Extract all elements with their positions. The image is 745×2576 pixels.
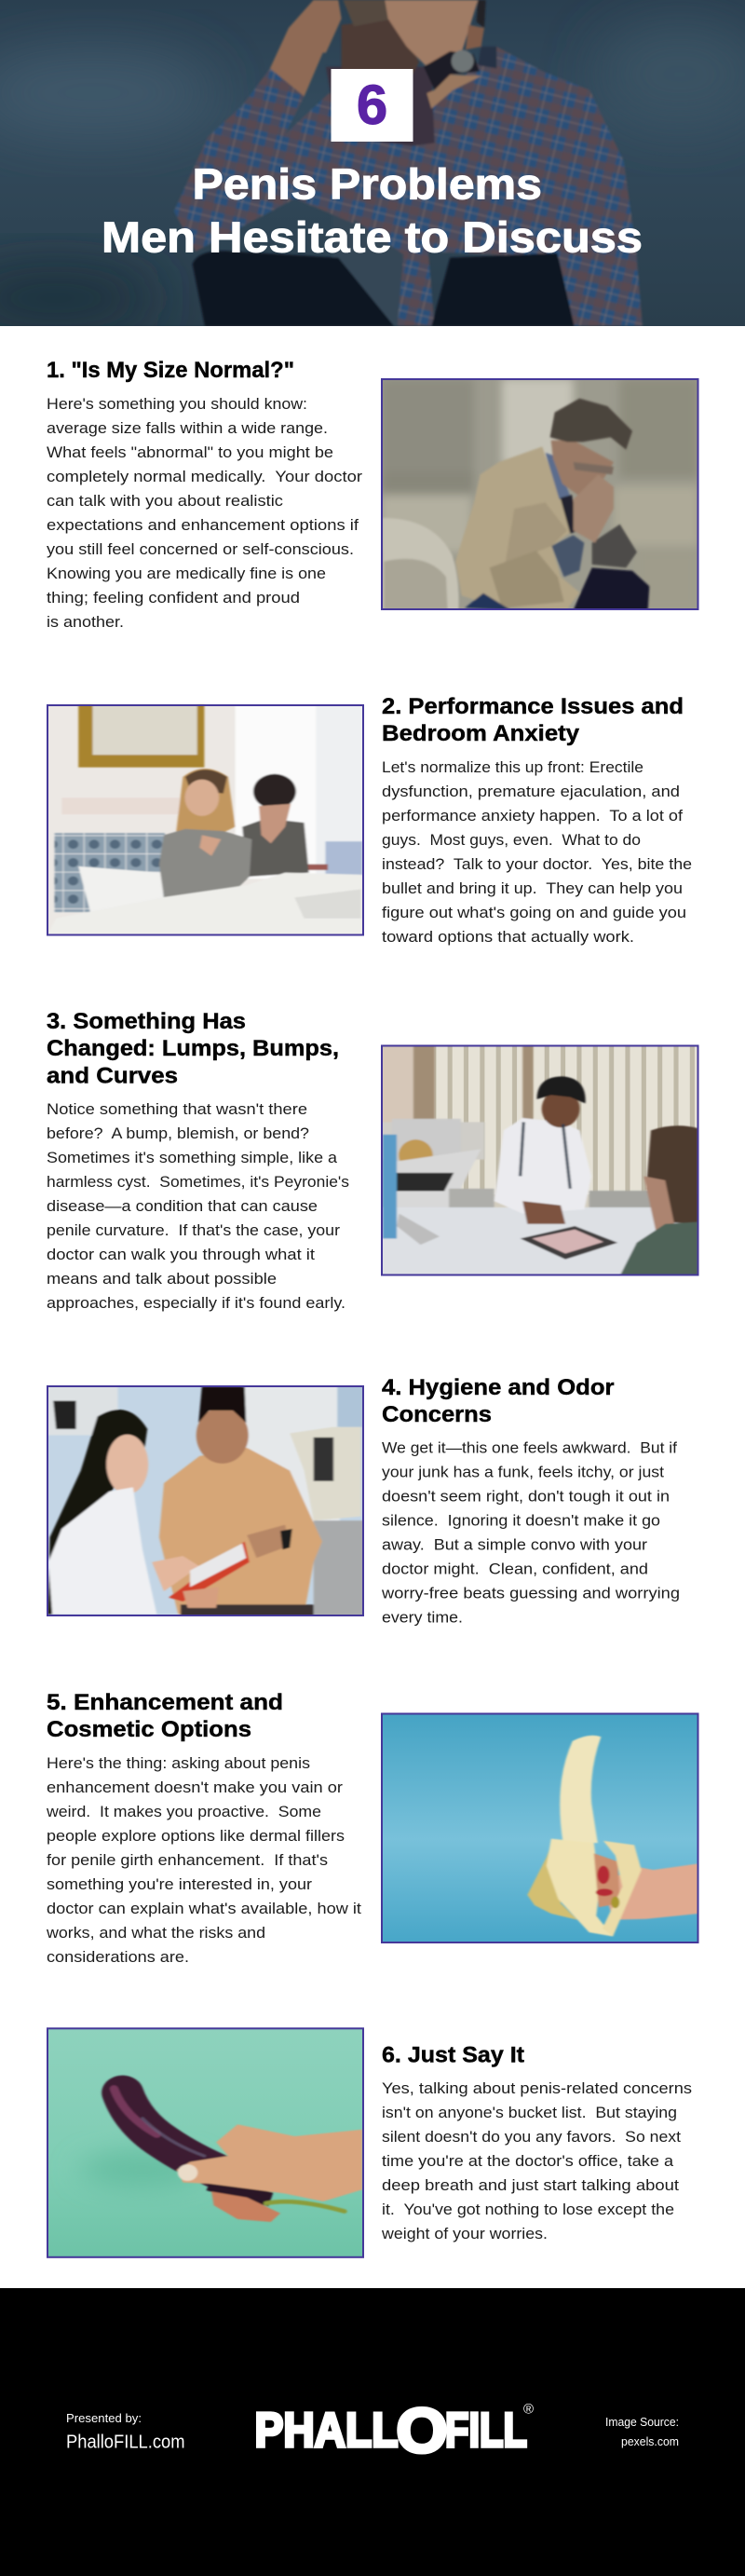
heading 3: Changed: Lumps, Bumps, [47, 1036, 339, 1061]
footer [0, 2288, 745, 2576]
heading 4 [382, 1375, 615, 1427]
body text 5: doctor can explain what's available, how it [47, 1900, 361, 1917]
image source: pexels.com [621, 2435, 679, 2448]
body text 1: expectations and enhancement options if [47, 516, 359, 534]
heading 5 [47, 1690, 283, 1742]
heading 1: 1. "Is My Size Normal?" [47, 358, 294, 383]
body text 4: doctor might. Clean, confident, and [382, 1560, 648, 1578]
header photo: man holding his head [0, 0, 745, 331]
body text 3: means and talk about possible [47, 1270, 277, 1288]
body text 5: enhancement doesn't make you vain or [47, 1779, 343, 1796]
heading 2: 2. Performance Issues and [382, 694, 684, 719]
presented by [66, 2411, 184, 2452]
photo: doctor with patient [381, 1044, 698, 1276]
heading 5: 5. Enhancement and [47, 1690, 283, 1715]
photo: couple in bed [47, 704, 364, 935]
body text 2: bullet and bring it up. They can help you [382, 879, 683, 897]
body text 4: We get it—this one feels awkward. But if [382, 1438, 677, 1457]
photo: worried man on sofa [381, 378, 698, 610]
body text 1: thing; feeling confident and proud [47, 589, 300, 607]
body text 3: Notice something that wasn't there [47, 1100, 307, 1118]
body text 3: Sometimes it's something simple, like a [47, 1149, 338, 1166]
logo [255, 2396, 534, 2466]
body text 3: doctor can walk you through what it [47, 1246, 315, 1263]
body text 2: figure out what's going on and guide you [382, 904, 686, 921]
body text 6: weight of your worries. [381, 2225, 548, 2242]
title: Penis Problems [192, 160, 542, 209]
section 5 [46, 1690, 698, 1966]
body text 4: away. But a simple convo with your [382, 1535, 647, 1554]
image source [605, 2416, 679, 2448]
body text 4: your junk has a funk, feels itchy, or just [382, 1463, 664, 1481]
body text 4: silence. Ignoring it doesn't make it go [382, 1511, 660, 1530]
body text 6: silent doesn't do you any favors. So next [382, 2128, 681, 2146]
body text 6: Yes, talking about penis-related concerns [382, 2079, 692, 2097]
heading 2: Bedroom Anxiety [382, 721, 579, 746]
body text 2: guys. Most guys, even. What to do [382, 831, 641, 849]
presented by: PhalloFILL.com [66, 2432, 184, 2452]
body text 3: before? A bump, blemish, or bend? [47, 1124, 309, 1142]
body text 6: isn't on anyone's bucket list. But staying [382, 2104, 677, 2121]
body text 4: worry-free beats guessing and worrying [381, 1584, 680, 1602]
photo: hand holding eggplant on green background [47, 2027, 364, 2258]
body text 1: completely normal medically. Your doctor [47, 468, 362, 485]
body text 1: average size falls within a wide range. [47, 419, 328, 437]
body text 5: Here's the thing: asking about penis [47, 1754, 310, 1772]
logo: O [397, 2396, 447, 2466]
body text 3: harmless cyst. Sometimes, it's Peyronie's [47, 1173, 349, 1191]
body text 1 [47, 395, 362, 631]
section 4 [47, 1375, 680, 1627]
body text 3: disease—a condition that can cause [47, 1197, 318, 1215]
heading 5: Cosmetic Options [47, 1717, 251, 1742]
photo: peeled banana on blue background [381, 1712, 698, 1943]
body text 1: Here's something you should know: [47, 395, 307, 413]
logo: PHALL [255, 2404, 399, 2458]
logo: ® [523, 2402, 534, 2417]
body text 5: considerations are. [47, 1948, 189, 1966]
number badge: 6 [357, 74, 387, 136]
body text 5: for penile girth enhancement. If that's [47, 1851, 328, 1869]
body text 1: you still feel concerned or self-conscious. [47, 540, 354, 558]
body text 2: Let's normalize this up front: Erectile [382, 758, 643, 776]
heading 4: Concerns [382, 1402, 492, 1427]
body text 3: approaches, especially if it's found early. [47, 1294, 345, 1312]
heading 3 [47, 1009, 339, 1088]
heading 6: 6. Just Say It [382, 2042, 524, 2068]
body text 2: toward options that actually work. [382, 928, 634, 946]
logo: FILL [445, 2404, 527, 2458]
header banner [0, 0, 745, 331]
body text 2: performance anxiety happen. To a lot of [382, 807, 683, 825]
body text 1: What feels "abnormal" to you might be [47, 443, 333, 461]
body text 5: something you're interested in, your [47, 1875, 312, 1893]
body text 2: dysfunction, premature ejaculation, and [382, 783, 680, 800]
body text 5: works, and what the risks and [46, 1924, 265, 1942]
presented by: Presented by: [66, 2411, 142, 2425]
body text 3: penile curvature. If that's the case, your [47, 1221, 340, 1239]
section 2 [47, 694, 692, 946]
number badge [332, 69, 413, 142]
body text 3 [47, 1100, 349, 1312]
heading 4: 4. Hygiene and Odor [382, 1375, 615, 1400]
section 6 [47, 2027, 692, 2258]
section 3 [47, 1009, 698, 1312]
body text 1: can talk with you about realistic [47, 492, 284, 510]
body text 6: deep breath and just start talking about [382, 2176, 679, 2194]
body text 5: people explore options like dermal fillers [47, 1827, 345, 1845]
body text 6: it. You've got nothing to lose except the [382, 2201, 674, 2218]
body text 1: is another. [47, 613, 124, 631]
body text 5 [46, 1754, 361, 1966]
heading 3: 3. Something Has [47, 1009, 246, 1034]
body text 2: instead? Talk to your doctor. Yes, bite the [382, 855, 692, 873]
heading 3: and Curves [47, 1064, 178, 1088]
photo: doctor and patient with notebook [47, 1385, 364, 1616]
body text 2 [382, 758, 692, 946]
title [102, 160, 643, 261]
body text 1: Knowing you are medically fine is one [47, 565, 326, 582]
image source: Image Source: [605, 2416, 679, 2429]
body text 4: doesn't seem right, don't tough it out in [382, 1487, 670, 1506]
body text 4 [381, 1438, 680, 1627]
body text 5: weird. It makes you proactive. Some [46, 1803, 321, 1820]
body text 6: time you're at the doctor's office, take a [382, 2152, 674, 2170]
body text 4: every time. [382, 1608, 463, 1627]
body text 6 [381, 2079, 692, 2242]
heading 2 [382, 694, 684, 746]
title: Men Hesitate to Discuss [102, 212, 643, 261]
section 1 [47, 358, 698, 631]
